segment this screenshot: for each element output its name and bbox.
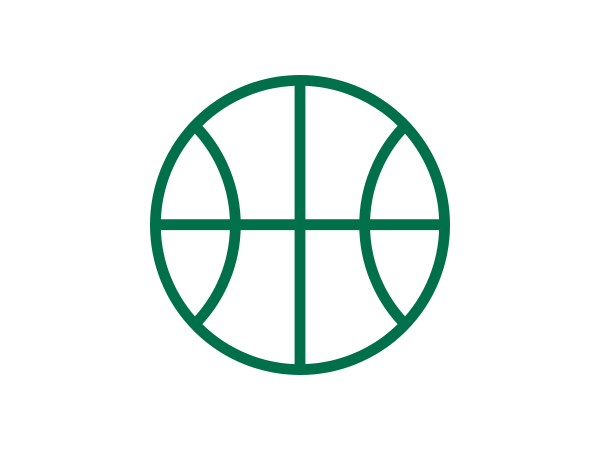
horizontal seam (155, 219, 445, 230)
right curved seam (365, 129, 402, 321)
vertical seam (295, 80, 305, 370)
left curved seam (198, 129, 235, 321)
ball outline (155, 80, 445, 370)
